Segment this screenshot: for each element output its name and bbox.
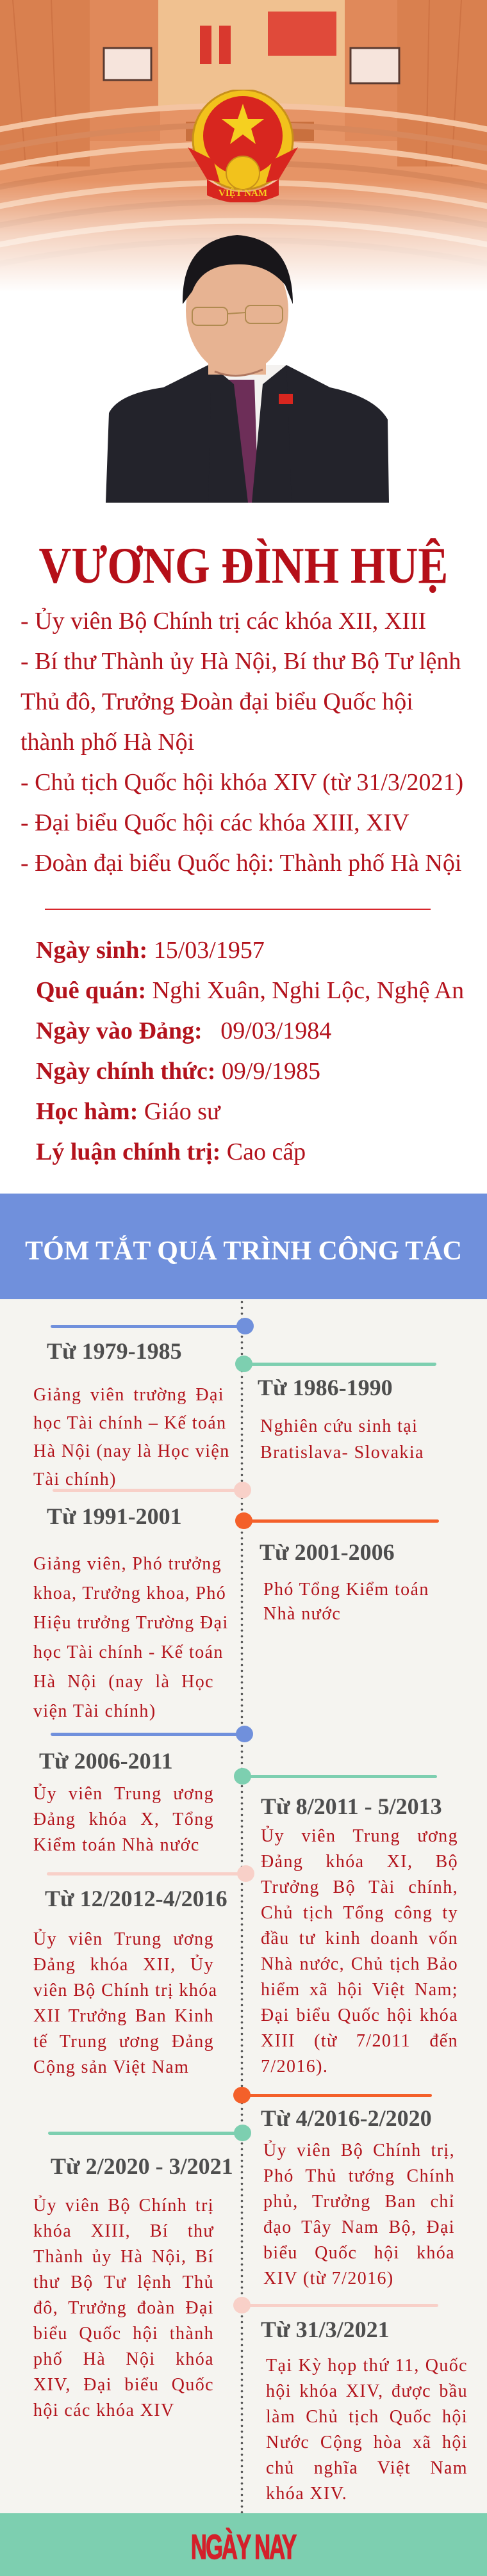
entry 12/2012-4/2016: Cộng sản Việt Nam (33, 2057, 189, 2077)
text block: positions: Thủ đô, Trưởng Đoàn đại biểu Quốc hội (21, 688, 413, 715)
entry 2/2020 - 3/2021: phố Hà Nội khóa (33, 2349, 214, 2369)
text block: positions: thành phố Hà Nội (21, 729, 194, 756)
entry 2001-2006 (260, 1539, 429, 1624)
entry 8/2011 - 5/2013: đầu tư kinh doanh vốn (261, 1929, 458, 1948)
entry 2/2020 - 3/2021: biểu Quốc hội thành (33, 2324, 214, 2344)
footer with logo (0, 2513, 487, 2576)
text block: positions: - Đoàn đại biểu Quốc hội: Thành phố Hà Nội (21, 850, 461, 877)
entry 4/2016-2/2020: XIV (từ 7/2016) (263, 2269, 394, 2288)
entry 2/2020 - 3/2021: Ủy viên Bộ Chính trị (33, 2196, 214, 2216)
entry 1991-2001: Hà Nội (nay là Học (33, 1672, 214, 1692)
entry 1986-1990: Nghiên cứu sinh tại (260, 1416, 418, 1436)
entry 1991-2001: Giảng viên, Phó trưởng (33, 1554, 222, 1574)
timeline markers (47, 1318, 439, 2313)
entry 12/2012-4/2016: XII Trưởng Ban Kinh (33, 2006, 214, 2026)
text block: positions: - Chủ tịch Quốc hội khóa XIV (từ 31/3/2021) (21, 769, 463, 796)
entry 8/2011 - 5/2013: Từ 8/2011 - 5/2013 (261, 1794, 442, 1819)
entry 1979-1985 (33, 1338, 230, 1489)
text block: positions (21, 608, 463, 877)
entry 31/3/2021 (261, 2317, 468, 2504)
entry 31/3/2021: chủ nghĩa Việt Nam (266, 2458, 468, 2478)
entry 8/2011 - 5/2013: XIII (từ 7/2011 đến (261, 2031, 458, 2051)
entry 2/2020 - 3/2021: hội các khóa XIV (33, 2401, 175, 2420)
entry 4/2016-2/2020: đạo Tây Nam Bộ, Đại (263, 2217, 455, 2237)
entry 12/2012-4/2016: viên Bộ Chính trị khóa (33, 1981, 217, 2000)
text block: personal info: Quê quán: Nghi Xuân, Nghi Lộc, Nghệ An (36, 977, 464, 1004)
text block: personal info: Học hàm: Giáo sư (36, 1098, 220, 1125)
entry 8/2011 - 5/2013: hiểm xã hội Việt Nam; (261, 1980, 458, 2000)
text block: personal info: Ngày chính thức: 09/9/1985 (36, 1058, 320, 1085)
entry 8/2011 - 5/2013: Đại biểu Quốc hội khóa (261, 2005, 458, 2025)
icon: national emblem (188, 90, 298, 202)
entry 2/2020 - 3/2021: XIV, Đại biểu Quốc (33, 2375, 214, 2395)
entry 4/2016-2/2020: Phó Thủ tướng Chính (263, 2166, 455, 2186)
entry 8/2011 - 5/2013: Đảng khóa XI, Bộ (261, 1852, 458, 1872)
entry 12/2012-4/2016: Ủy viên Trung ương (33, 1929, 214, 1949)
entry 2006-2011: Đảng khóa X, Tổng (33, 1810, 214, 1829)
entry 1991-2001: Hiệu trưởng Trường Đại (33, 1613, 229, 1633)
entry 2/2020 - 3/2021 (33, 2153, 233, 2420)
entry 2001-2006: Từ 2001-2006 (260, 1539, 395, 1565)
entry 12/2012-4/2016: Đảng khóa XII, Ủy (33, 1955, 214, 1975)
entry 12/2012-4/2016 (33, 1886, 227, 2077)
entry 2001-2006: Nhà nước (263, 1604, 341, 1624)
entry 2006-2011: Kiểm toán Nhà nước (33, 1835, 200, 1855)
entry 2/2020 - 3/2021: khóa XIII, Bí thư (33, 2221, 214, 2241)
entry 4/2016-2/2020: phủ, Trưởng Ban chỉ (263, 2192, 455, 2212)
entry 8/2011 - 5/2013 (261, 1794, 458, 2077)
entry 4/2016-2/2020: Từ 4/2016-2/2020 (261, 2105, 432, 2131)
text block: personal info (36, 937, 464, 1165)
entry 1986-1990: Bratislava- Slovakia (260, 1443, 424, 1462)
entry 4/2016-2/2020: Ủy viên Bộ Chính trị, (263, 2141, 455, 2160)
entry 12/2012-4/2016: tế Trung ương Đảng (33, 2032, 214, 2052)
entry 1991-2001: học Tài chính - Kế toán (33, 1642, 224, 1662)
entry 31/3/2021: khóa XIV. (266, 2484, 347, 2504)
entry 8/2011 - 5/2013: Trưởng Bộ Tài chính, (261, 1877, 458, 1897)
entry 31/3/2021: hội khóa XIV, được bầu (266, 2381, 468, 2401)
section heading band: TÓM TẮT QUÁ TRÌNH CÔNG TÁC (25, 1236, 462, 1266)
entry 4/2016-2/2020 (261, 2105, 455, 2288)
entry 1979-1985: Giảng viên trường Đại (33, 1385, 224, 1405)
entry 1991-2001: khoa, Trưởng khoa, Phó (33, 1584, 226, 1603)
entry 8/2011 - 5/2013: 7/2016). (261, 2057, 328, 2077)
entry 1991-2001: viện Tài chính) (33, 1701, 156, 1721)
title: name: VƯƠNG ĐÌNH HUỆ (39, 538, 448, 594)
text block: positions: - Ủy viên Bộ Chính trị các khóa XII, XIII (21, 608, 426, 635)
text block: personal info: Lý luận chính trị: Cao cấp (36, 1138, 306, 1165)
entry 2/2020 - 3/2021: Thành ủy Hà Nội, Bí (33, 2247, 214, 2267)
entry 2001-2006: Phó Tổng Kiểm toán (263, 1580, 429, 1600)
text block: positions: - Bí thư Thành ủy Hà Nội, Bí thư Bộ Tư lệnh (21, 648, 461, 675)
panel: timeline (0, 1299, 487, 2513)
entry 1979-1985: Hà Nội (nay là Học viện (33, 1441, 230, 1461)
entry 8/2011 - 5/2013: Chủ tịch Tổng công ty (261, 1903, 458, 1923)
entry 8/2011 - 5/2013: Ủy viên Trung ương (261, 1826, 458, 1846)
entry 2006-2011 (33, 1748, 214, 1855)
entry 1979-1985: Tài chính) (33, 1470, 117, 1489)
icon: national emblem: VIỆT NAM (219, 188, 267, 198)
entry 31/3/2021: Nước Cộng hòa xã hội (266, 2433, 468, 2452)
section heading band (0, 1194, 487, 1299)
text block: personal info: Ngày sinh: 15/03/1957 (36, 937, 265, 964)
entry 1979-1985: học Tài chính – Kế toán (33, 1413, 227, 1433)
entry 2/2020 - 3/2021: Từ 2/2020 - 3/2021 (51, 2153, 233, 2179)
entry 2/2020 - 3/2021: đô, Trưởng đoàn Đại (33, 2298, 214, 2318)
entry 8/2011 - 5/2013: Nhà nước, Chủ tịch Bảo (261, 1954, 458, 1974)
entry 12/2012-4/2016: Từ 12/2012-4/2016 (45, 1886, 227, 1911)
entry 2006-2011: Ủy viên Trung ương (33, 1784, 214, 1804)
entry 1991-2001 (33, 1503, 229, 1721)
portrait photo (106, 235, 389, 503)
entry 4/2016-2/2020: biểu Quốc hội khóa (263, 2243, 455, 2263)
entry 1979-1985: Từ 1979-1985 (47, 1338, 182, 1364)
entry 2/2020 - 3/2021: thư Bộ Tư lệnh Thủ (33, 2272, 214, 2292)
entry 31/3/2021: Tại Kỳ họp thứ 11, Quốc (266, 2356, 468, 2376)
entry 31/3/2021: làm Chủ tịch Quốc hội (266, 2407, 468, 2427)
text block: positions: - Đại biểu Quốc hội các khóa XIII, XIV (21, 809, 409, 836)
header photo: assembly hall (0, 0, 487, 284)
entry 1986-1990 (258, 1375, 424, 1462)
entry 1991-2001: Từ 1991-2001 (47, 1503, 182, 1529)
footer with logo: NGÀY NAY (191, 2528, 296, 2566)
entry 2006-2011: Từ 2006-2011 (39, 1748, 173, 1774)
entry 1986-1990: Từ 1986-1990 (258, 1375, 393, 1400)
entry 31/3/2021: Từ 31/3/2021 (261, 2317, 390, 2342)
text block: personal info: Ngày vào Đảng: 09/03/1984 (36, 1017, 331, 1044)
